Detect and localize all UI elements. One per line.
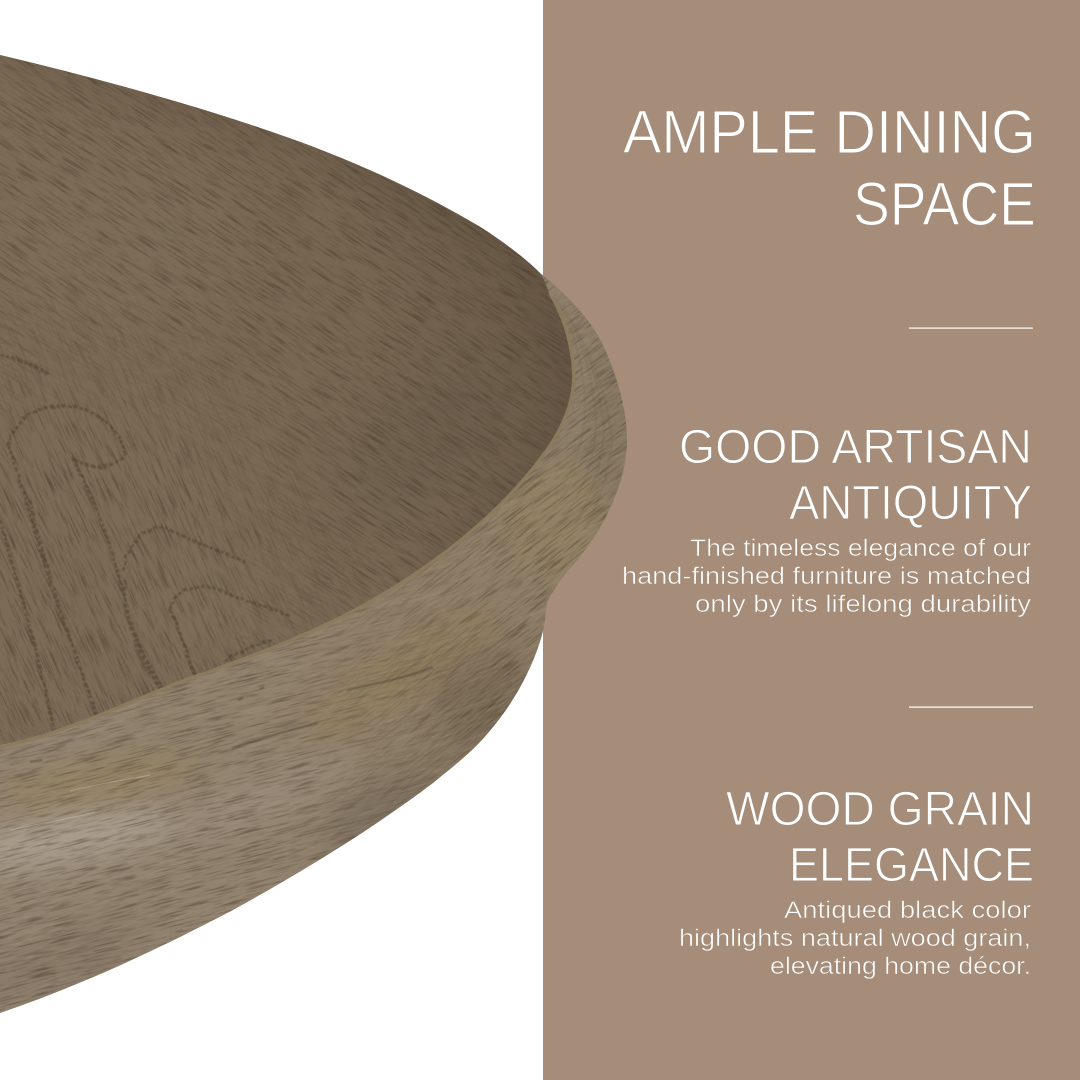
text block: wood grain description — [679, 897, 1031, 980]
top grain, right side — [0, 58, 571, 654]
text block: artisan description: only by its lifelong durability — [695, 591, 1031, 618]
curved grain on right shoulder — [563, 310, 586, 348]
text block: wood grain description: highlights natural wood grain, — [679, 925, 1031, 952]
text block: artisan description: hand-finished furniture is matched — [622, 563, 1031, 590]
heading: good artisan antiquity: GOOD ARTISAN — [679, 421, 1032, 474]
photo: round wood table top — [0, 52, 630, 1024]
rim cracks — [30, 667, 433, 762]
table surface — [0, 52, 575, 750]
heading: wood grain elegance: WOOD GRAIN — [726, 783, 1034, 836]
rim lip highlight — [0, 297, 574, 747]
heading: ample dining space: AMPLE DINING — [623, 98, 1036, 166]
heading: ample dining space: SPACE — [853, 170, 1036, 238]
top grain, lower left — [0, 326, 316, 744]
divider 1 — [909, 328, 1033, 329]
text block: wood grain description: Antiqued black color — [784, 897, 1031, 924]
far edge shade — [0, 52, 540, 270]
cathedral grain pattern — [0, 355, 290, 735]
near wall shade — [428, 297, 572, 563]
heading: ample dining space — [623, 98, 1036, 238]
text block: artisan description — [622, 535, 1031, 618]
heading: good artisan antiquity — [679, 421, 1032, 530]
panel: right taupe background — [543, 0, 1080, 1080]
rim grain — [325, 238, 627, 844]
heading: good artisan antiquity: ANTIQUITY — [789, 477, 1032, 530]
text block: wood grain description: elevating home décor. — [770, 953, 1031, 980]
rim light scratches — [10, 775, 150, 830]
text block: artisan description: The timeless elegance of our — [690, 535, 1031, 562]
heading: wood grain elegance — [726, 783, 1034, 892]
heading: wood grain elegance: ELEGANCE — [789, 839, 1034, 892]
table rim and underside — [0, 55, 630, 1024]
divider 2 — [909, 706, 1033, 708]
